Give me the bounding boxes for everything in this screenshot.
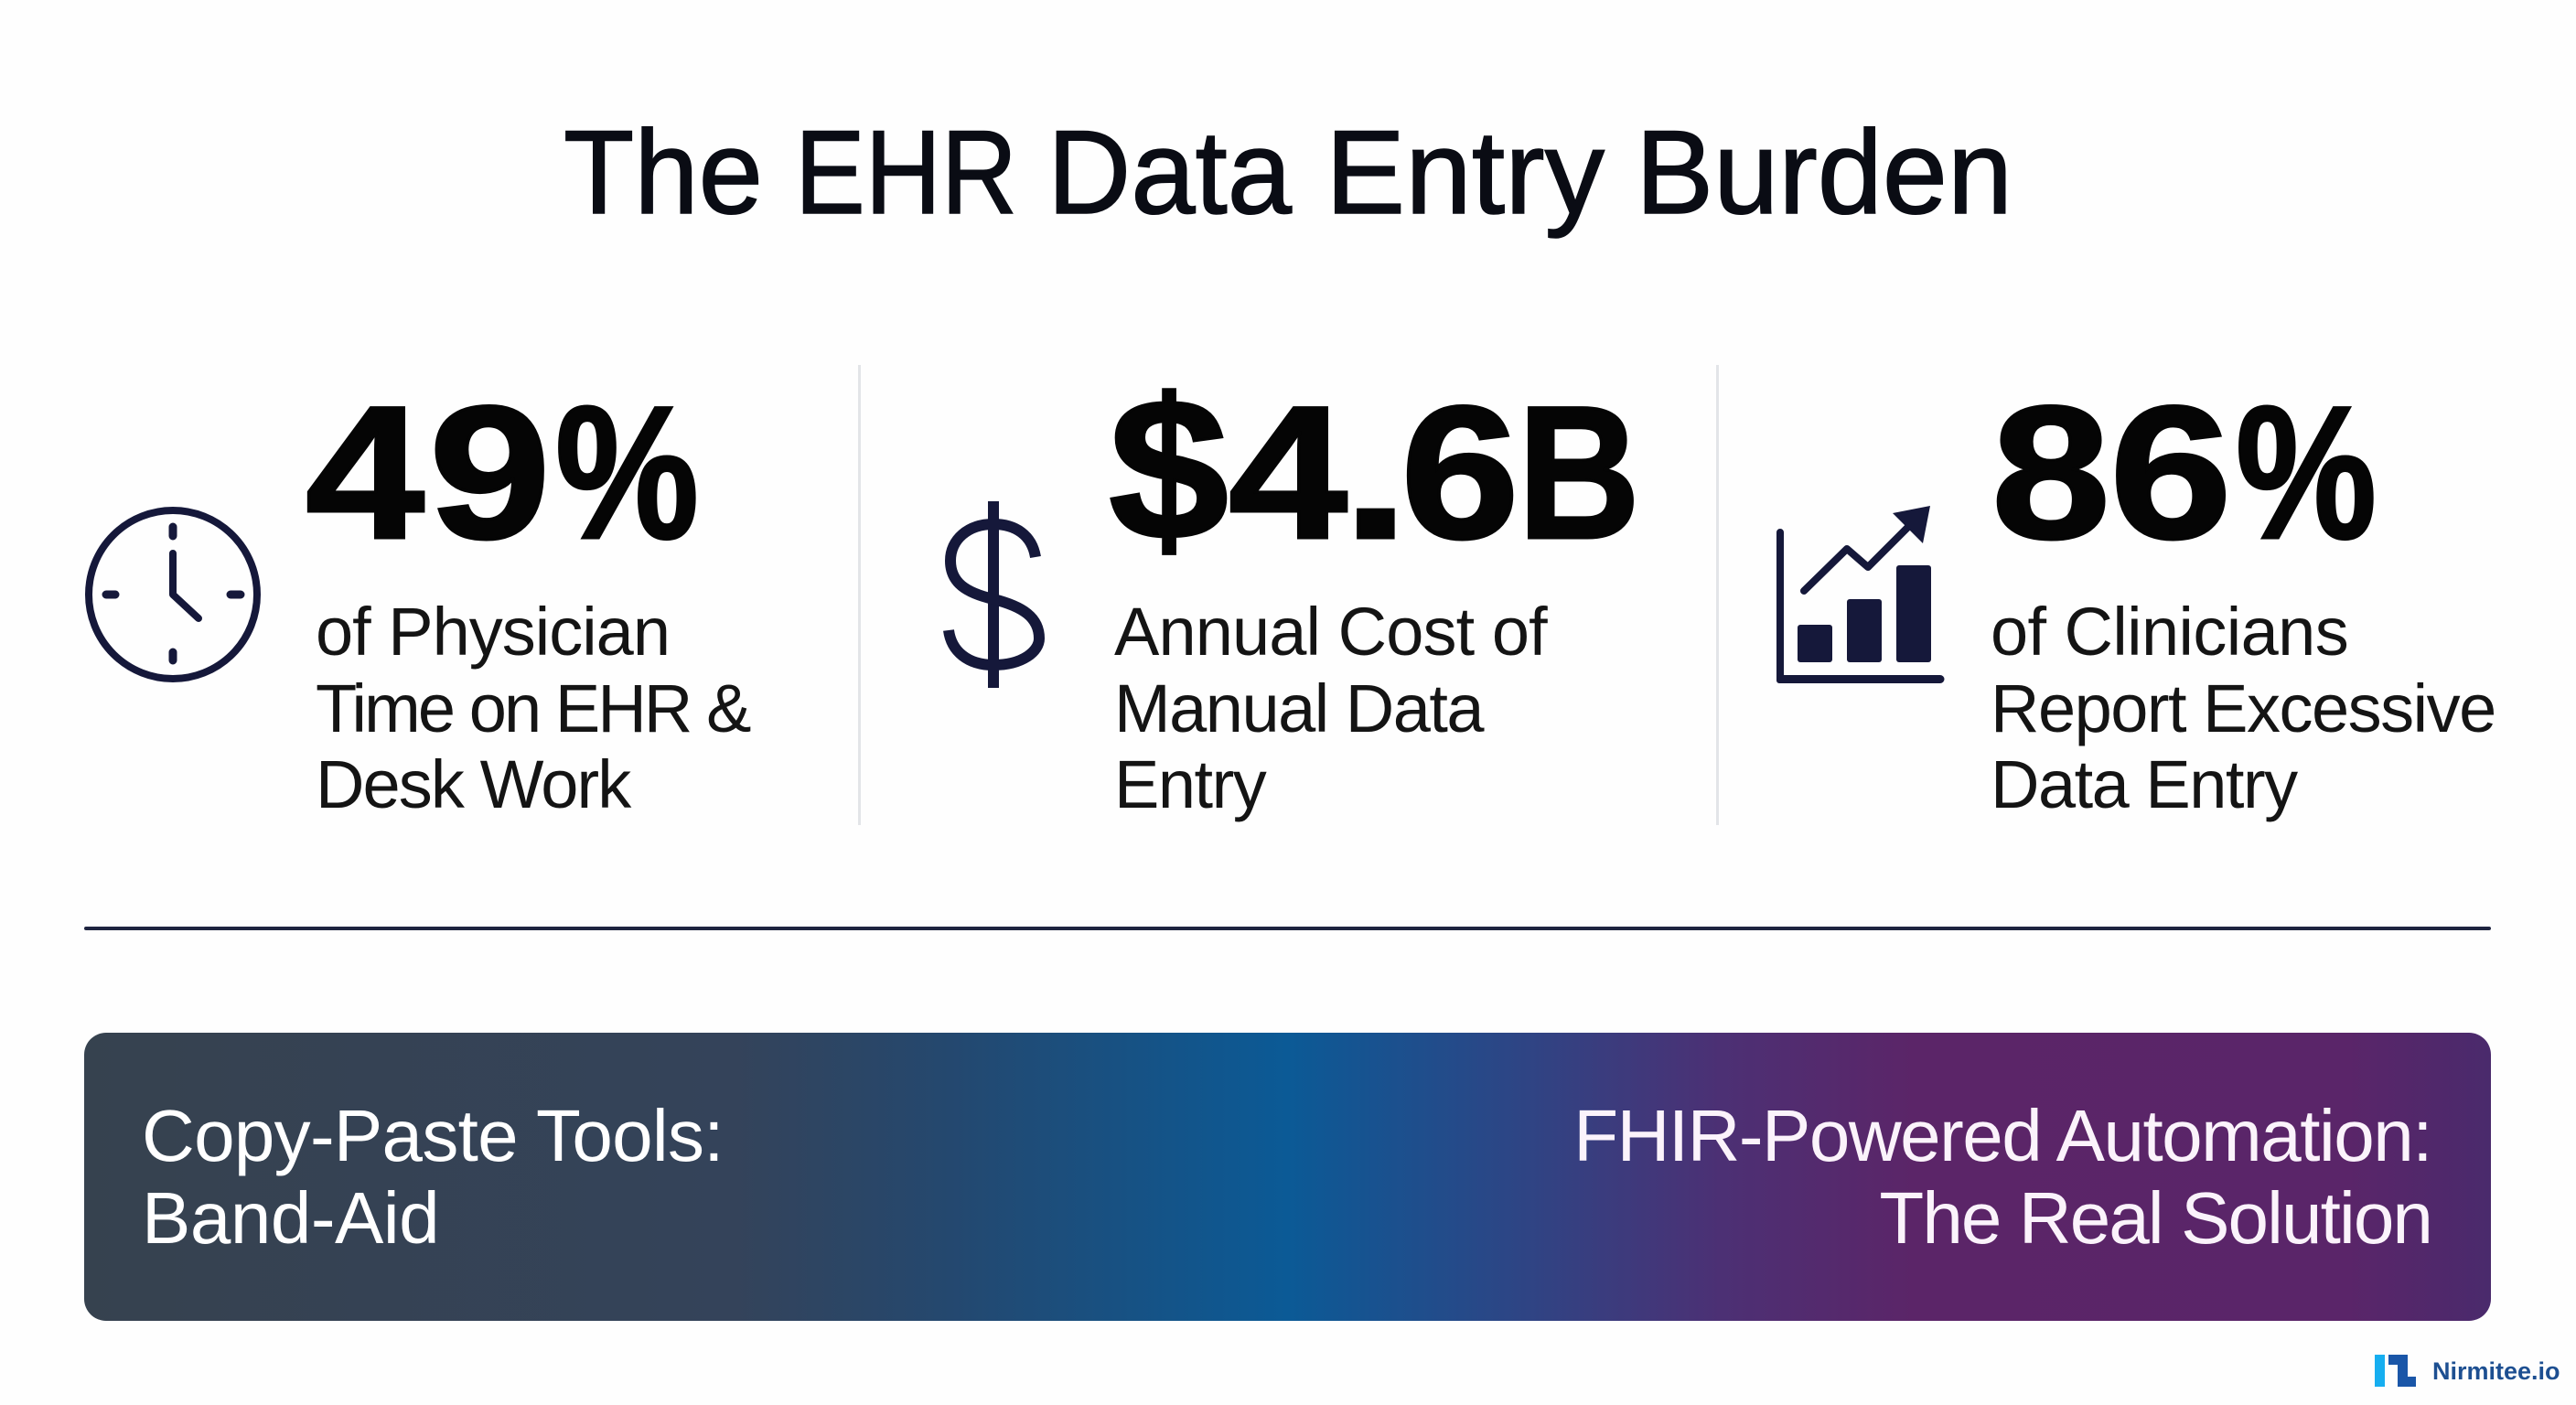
banner background [84,1033,2491,1321]
stat label: annual cost: Annual Cost of [1114,594,1548,670]
horizontal rule [84,927,2491,930]
stat value: 86% [1991,367,2377,578]
stat label: clinicians: Data Entry [1991,746,2298,822]
stat value: 49% [306,367,699,578]
panel: gradient banner [84,1033,2491,1321]
stat value: $4.6B: 6 [1401,367,1519,578]
icon: bar chart with rising arrow [1776,506,1945,683]
stat label: physician time: of Physician [316,594,670,670]
banner text: copy-paste tools: Copy-Paste Tools: [142,1095,724,1176]
stat value: $4.6B: B [1518,367,1640,578]
logo mark [2375,1355,2416,1387]
stat label: clinicians: Report Excessive [1991,670,2496,746]
stat value: $4.6B: . [1342,367,1410,578]
stat value: $4.6B: $ [1109,357,1229,582]
stat value: 49%: % [555,367,699,578]
banner text: FHIR automation: The Real Solution [1879,1177,2431,1259]
panel: annual cost stat [949,357,1640,822]
title [564,105,2012,239]
logo: Nirmitee.io [2375,1355,2560,1387]
title: Entry [1326,105,1605,239]
stat value: $4.6B [1109,357,1640,582]
stat value: 86%: 6 [2109,367,2232,578]
stat value: 49%: 9 [429,367,551,578]
stat label: clinicians: of Clinicians [1991,594,2348,670]
stat label: physician time: Desk Work [316,746,632,822]
panel: clinicians stat [1776,367,2496,822]
stat label: annual cost: Entry [1114,746,1267,822]
stat label: physician time: Time on EHR & [316,670,751,746]
title: Data [1047,105,1293,239]
panel: physician time stat [89,367,751,822]
stat value: $4.6B: 4 [1229,367,1347,578]
stat label: annual cost: Manual Data [1114,670,1485,746]
title: EHR [795,105,1017,239]
banner text: FHIR automation: FHIR-Powered Automation: [1573,1095,2431,1176]
stat value: 86%: 8 [1991,367,2110,578]
title: Burden [1636,105,2012,239]
title: The [564,105,763,239]
stat value: 86%: % [2236,367,2377,578]
icon: clock [89,510,257,679]
divider right [1716,365,1719,825]
logo wordmark: Nirmitee.io [2432,1357,2560,1385]
banner text: copy-paste tools: Band-Aid [142,1177,439,1259]
stat value: 49%: 4 [306,367,424,578]
icon: dollar sign [949,501,1039,688]
divider left [858,365,861,825]
